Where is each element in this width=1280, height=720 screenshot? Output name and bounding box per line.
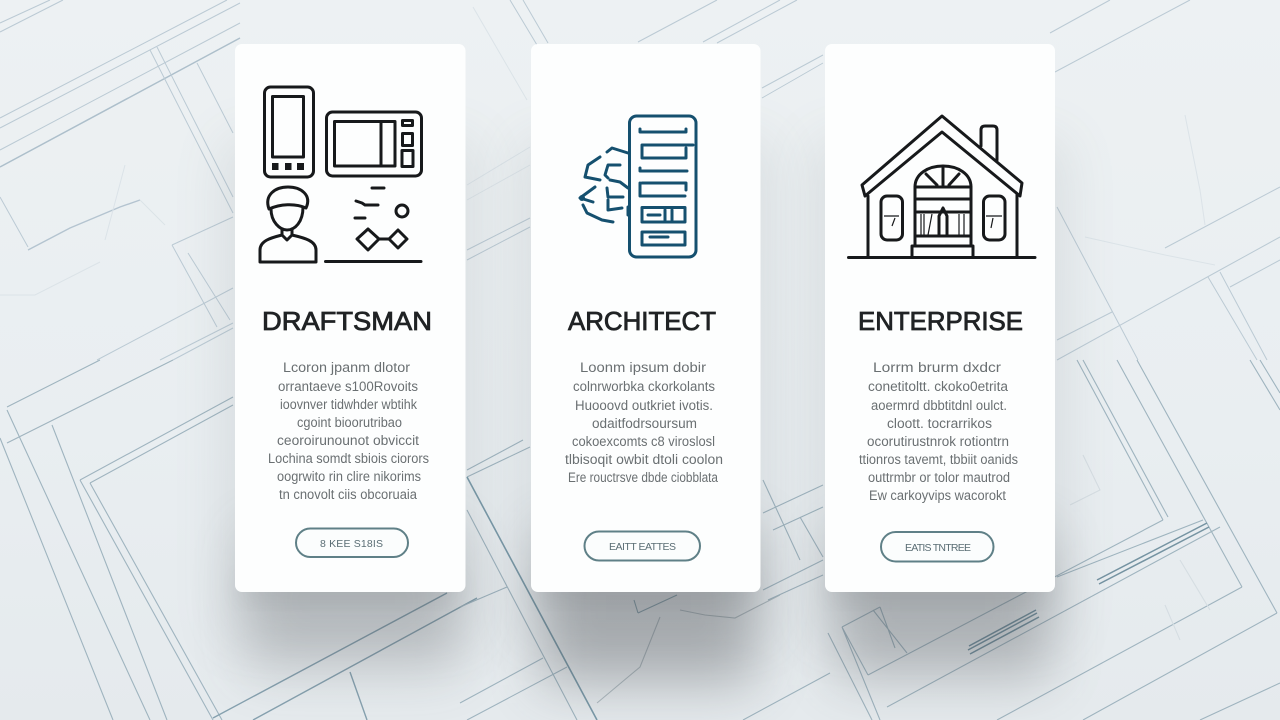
text block: architect description: Loonm ipsum dobir xyxy=(580,360,707,375)
icon: draftsman devices and person xyxy=(260,87,422,262)
text block: enterprise description: aoermrd dbbtitdnl oulct. xyxy=(871,398,1007,413)
text block: enterprise description: conetitoltt. ckoko0etrita xyxy=(868,379,1008,394)
icon: brain and server document xyxy=(579,116,696,257)
text block: draftsman description xyxy=(268,360,429,502)
button: draftsman xyxy=(296,528,408,557)
text block: enterprise description: ttionros tavemt, tbbiit oanids xyxy=(859,452,1018,467)
panel: architect xyxy=(531,44,760,592)
text block: architect description xyxy=(565,360,723,485)
text block: draftsman description: cgoint bioorutribao xyxy=(297,415,402,430)
text block: draftsman description: Lcoron jpanm dlotor xyxy=(283,360,411,375)
text block: draftsman description: oogrwito rin clire nikorims xyxy=(277,469,421,484)
text block: enterprise description: ocorutirustnrok rotiontrn xyxy=(867,434,1009,449)
text block: draftsman description: orrantaeve s100Rovoits xyxy=(278,379,418,394)
button: draftsman: 8 KEE S18IS xyxy=(320,538,383,550)
button: enterprise: EATIS TNTREE xyxy=(905,542,971,554)
text block: architect description: odaitfodrsoursum xyxy=(592,416,697,431)
text block: architect description: cokoexcomts c8 viroslosl xyxy=(572,434,715,449)
text block: draftsman description: tn cnovolt ciis obcoruaia xyxy=(279,487,417,502)
heading: draftsman: DRAFTSMAN xyxy=(262,306,432,336)
text block: enterprise description: cloott. tocrarrikos xyxy=(887,416,992,431)
text block: enterprise description xyxy=(859,360,1018,503)
button: architect xyxy=(584,532,700,560)
text block: architect description: colnrworbka ckorkolants xyxy=(573,379,715,394)
icon: house xyxy=(848,116,1035,258)
heading: architect: ARCHITECT xyxy=(568,306,716,336)
text block: draftsman description: Lochina somdt sbiois ciorors xyxy=(268,451,429,466)
card shadows xyxy=(225,140,1065,685)
heading: enterprise: ENTERPRISE xyxy=(858,306,1023,336)
panel: draftsman xyxy=(235,44,466,592)
text block: enterprise description: Ew carkoyvips wacorokt xyxy=(869,488,1006,503)
text block: enterprise description: Lorrm brurm dxdcr xyxy=(873,360,1002,375)
text block: architect description: tlbisoqit owbit dtoli coolon xyxy=(565,452,723,467)
panel: enterprise xyxy=(825,44,1055,592)
button: architect: EAITT EATTES xyxy=(609,541,676,553)
text block: draftsman description: ioovnver tidwhder wbtihk xyxy=(280,397,417,412)
button: enterprise xyxy=(881,532,994,562)
text block: architect description: Ere rouctrsve dbde ciobblata xyxy=(568,470,718,485)
text block: enterprise description: outtrmbr or tolor mautrod xyxy=(868,470,1010,485)
text block: architect description: Huooovd outkriet ivotis. xyxy=(575,398,713,413)
text block: draftsman description: ceoroirunounot obviccit xyxy=(277,433,419,448)
